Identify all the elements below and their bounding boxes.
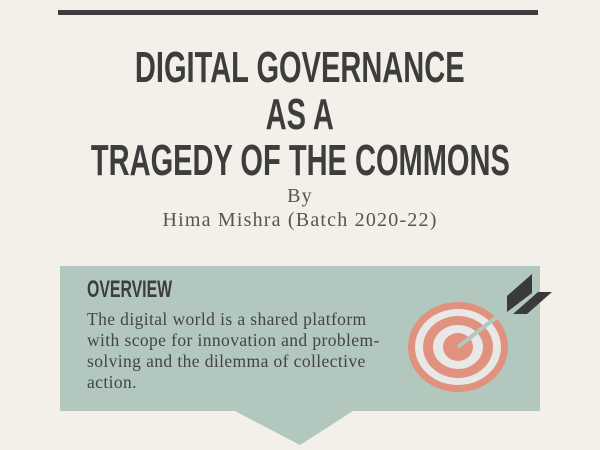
text block: action.	[87, 372, 137, 392]
title	[91, 43, 509, 185]
heading: overview: OVERVIEW	[87, 276, 172, 303]
title: DIGITAL GOVERNANCE	[135, 43, 465, 92]
text block: with scope for innovation and problem-	[87, 330, 380, 350]
text block: solving and the dilemma of collective	[87, 351, 366, 371]
byline: By	[287, 185, 313, 207]
panel: overview	[60, 266, 552, 445]
top bar	[58, 10, 538, 15]
text block	[87, 309, 380, 392]
byline	[162, 185, 438, 231]
byline: Hima Mishra (Batch 2020-22)	[162, 209, 438, 231]
text block: The digital world is a shared platform	[87, 309, 367, 329]
title: TRAGEDY OF THE COMMONS	[91, 136, 509, 185]
icon: target with arrow	[408, 274, 552, 392]
title: AS A	[266, 90, 334, 139]
